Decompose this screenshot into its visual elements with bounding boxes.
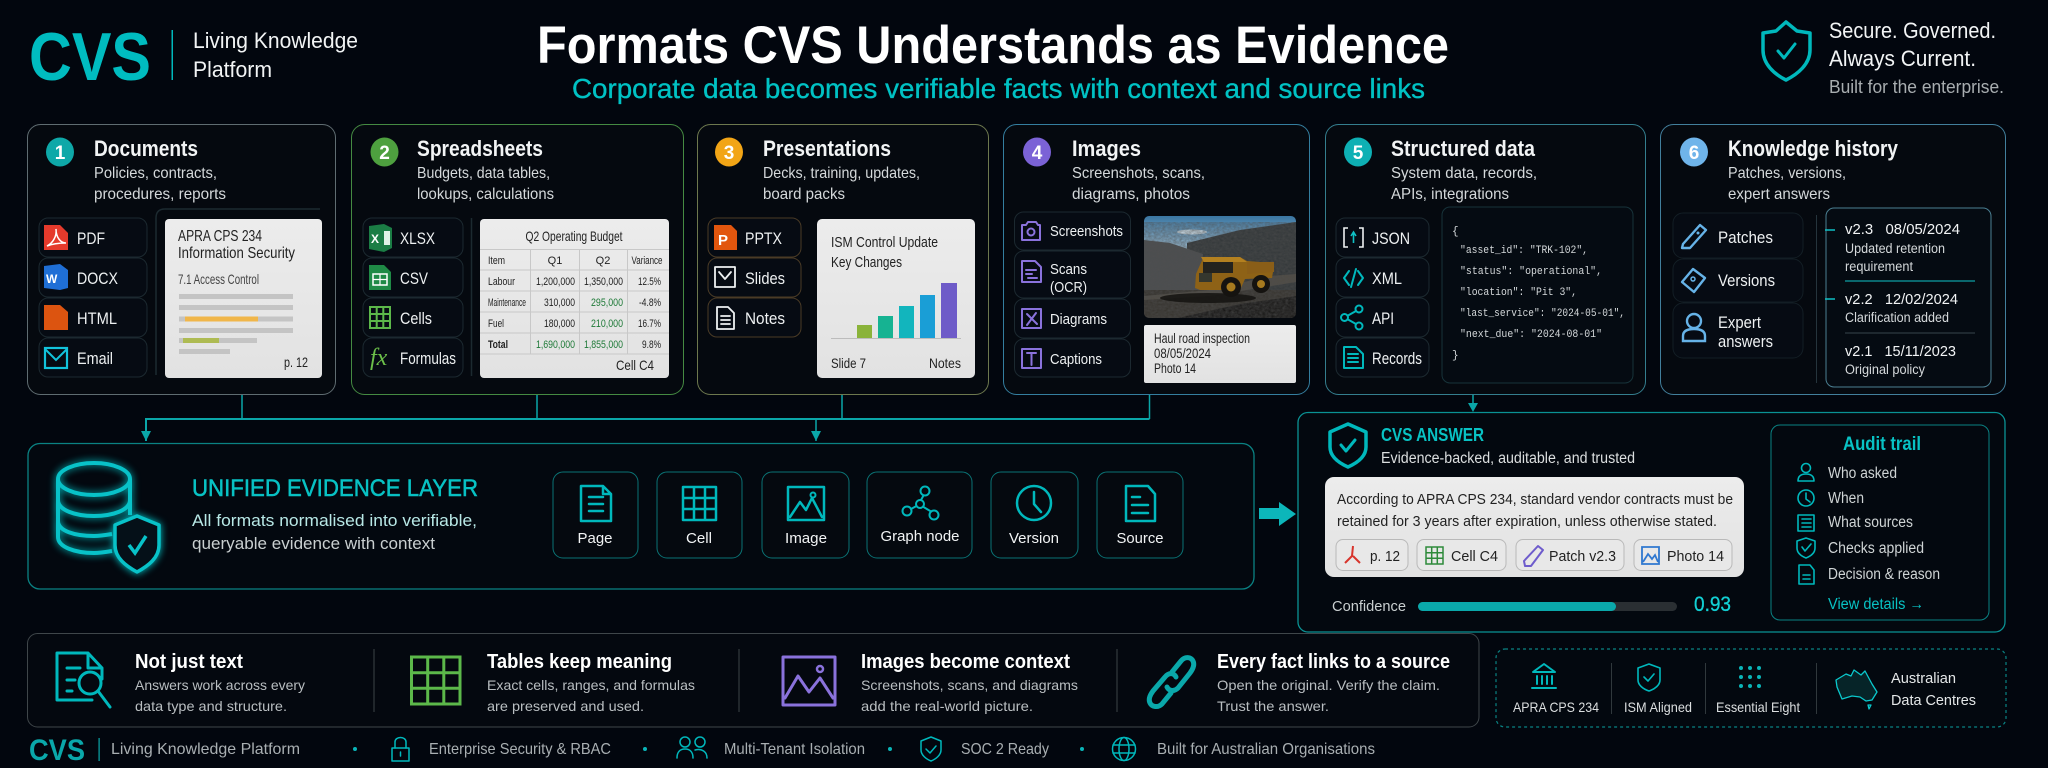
tile: cell: Cell bbox=[686, 530, 712, 547]
benefit: every fact links to a source: Open the original. Verify the claim. bbox=[1217, 677, 1440, 693]
audit icons bbox=[1797, 464, 1815, 584]
badge: APRA CPS 234 bbox=[1513, 664, 1599, 715]
document preview card: p. 12 bbox=[284, 354, 308, 370]
header logo: Living Knowledge bbox=[193, 28, 358, 53]
budget table card bbox=[480, 219, 669, 378]
chips bbox=[1673, 213, 1803, 358]
icon: database with shield bbox=[58, 463, 159, 572]
slide preview card bbox=[817, 219, 975, 378]
benefit: every fact links to a source bbox=[1149, 651, 1450, 714]
number badge 6: 6 bbox=[1689, 143, 1699, 164]
number badge 4 bbox=[1023, 138, 1051, 166]
description: diagrams, photos bbox=[1072, 186, 1190, 203]
format chips: PDF bbox=[77, 229, 105, 248]
description: Patches, versions, bbox=[1728, 165, 1846, 182]
format chips: (OCR) bbox=[1050, 279, 1087, 296]
chips: Patches bbox=[1718, 228, 1773, 247]
format chips: HTML bbox=[77, 309, 117, 328]
format chips: Screenshots bbox=[1050, 223, 1123, 240]
document preview card bbox=[165, 219, 322, 378]
footer bar: Living Knowledge Platform bbox=[111, 741, 300, 758]
header trust badge bbox=[1763, 18, 2004, 97]
badge: ISM aligned: ISM Aligned bbox=[1624, 699, 1692, 715]
citation chips bbox=[1336, 540, 1732, 570]
budget table card: Labour bbox=[488, 276, 515, 288]
benefit: images become context: Screenshots, scans, and diagrams bbox=[861, 677, 1078, 693]
benefit: tables keep meaning: Tables keep meaning bbox=[487, 651, 672, 673]
tile: page bbox=[553, 472, 638, 558]
photo caption card: Photo 14 bbox=[1154, 361, 1196, 376]
citation chips: Cell C4 bbox=[1451, 548, 1498, 565]
format chips: Email bbox=[77, 349, 113, 368]
chips: answers bbox=[1718, 332, 1773, 351]
version timeline card: Clarification added bbox=[1845, 310, 1949, 325]
panel: audit trail: When bbox=[1828, 490, 1864, 507]
heading: Spreadsheets bbox=[417, 136, 543, 161]
format chips: API bbox=[1372, 309, 1394, 328]
footer bar: CVS bbox=[29, 734, 85, 767]
benefit: every fact links to a source: Trust the answer. bbox=[1217, 698, 1329, 714]
chips: Expert bbox=[1718, 313, 1761, 332]
number badge 6 bbox=[1680, 138, 1708, 166]
version timeline card: requirement bbox=[1845, 259, 1913, 274]
panel: audit trail: Who asked bbox=[1828, 465, 1897, 482]
budget table card: Fuel bbox=[488, 318, 504, 330]
format chips: P bbox=[718, 232, 728, 249]
tile: cell bbox=[657, 472, 742, 558]
panel: knowledge history bbox=[1660, 124, 2006, 394]
format chips: Cells bbox=[400, 309, 432, 328]
photo caption card bbox=[1144, 325, 1296, 383]
format chips: Formulas bbox=[400, 349, 456, 368]
panel: audit trail: Checks applied bbox=[1828, 540, 1924, 557]
panel: audit trail: Decision & reason bbox=[1828, 566, 1940, 583]
description: System data, records, bbox=[1391, 165, 1537, 182]
panel: structured data bbox=[1326, 124, 1646, 394]
description bbox=[192, 511, 477, 553]
tile: graph node bbox=[867, 472, 972, 558]
footer bar: SOC 2 Ready bbox=[961, 741, 1049, 758]
tile: version: Version bbox=[1009, 530, 1059, 547]
format chips: Notes bbox=[745, 309, 785, 328]
budget table card: Maintenance bbox=[488, 297, 526, 309]
format chips: Slides bbox=[745, 269, 785, 288]
tile: version bbox=[991, 472, 1078, 558]
description: procedures, reports bbox=[94, 186, 226, 203]
header trust badge: Secure. Governed. bbox=[1829, 18, 1996, 43]
JSON code box: } bbox=[1452, 350, 1459, 362]
format chips: CSV bbox=[400, 269, 429, 288]
footer bar bbox=[29, 734, 1375, 767]
budget table card: Item bbox=[488, 255, 505, 267]
panel: compliance badges bbox=[1496, 649, 2006, 727]
header logo: CVS bbox=[29, 19, 151, 95]
JSON code box bbox=[1442, 207, 1633, 383]
footer bar: Built for Australian Organisations bbox=[1157, 741, 1375, 758]
badge: australian data centres: Data Centres bbox=[1891, 692, 1976, 709]
budget table card: 1,350,000 bbox=[584, 276, 623, 288]
description: Budgets, data tables, bbox=[417, 165, 550, 182]
format chips: PPTX bbox=[745, 229, 782, 248]
photo caption card: Haul road inspection bbox=[1154, 331, 1250, 346]
panel: CVS answer bbox=[1298, 412, 2005, 632]
photo: haul truck at mine site bbox=[1144, 216, 1296, 318]
description: lookups, calculations bbox=[417, 186, 554, 203]
badge: APRA CPS 234: APRA CPS 234 bbox=[1513, 699, 1599, 715]
answer card bbox=[1325, 477, 1744, 577]
format chips bbox=[708, 218, 801, 337]
title: Formats CVS Understands as Evidence bbox=[537, 16, 1449, 75]
format chips: DOCX bbox=[77, 269, 118, 288]
tile: image bbox=[762, 472, 849, 558]
format chips: Scans bbox=[1050, 261, 1087, 278]
budget table card: 1,200,000 bbox=[536, 276, 575, 288]
description: Screenshots, scans, bbox=[1072, 165, 1205, 182]
format chips: Captions bbox=[1050, 351, 1102, 368]
slide preview card: Notes bbox=[929, 355, 961, 371]
format chips: JSON bbox=[1372, 229, 1410, 248]
benefit: images become context: Images become context bbox=[861, 651, 1070, 673]
budget table card: Total bbox=[488, 339, 508, 351]
budget table card: 295,000 bbox=[591, 297, 623, 309]
document preview card: APRA CPS 234 bbox=[178, 228, 262, 245]
number badge 5: 5 bbox=[1353, 143, 1364, 164]
JSON code box: "next_due": "2024-08-01" bbox=[1460, 329, 1602, 341]
benefit: images become context: add the real-world picture. bbox=[861, 698, 1033, 714]
document preview card: Information Security bbox=[178, 245, 295, 262]
budget table card: 1,855,000 bbox=[584, 339, 623, 351]
icon: lock bbox=[392, 738, 409, 761]
panel: audit trail: View details → bbox=[1828, 596, 1924, 613]
heading: UNIFIED EVIDENCE LAYER bbox=[192, 475, 478, 502]
budget table card: 1,690,000 bbox=[536, 339, 575, 351]
number badge 3 bbox=[715, 138, 743, 166]
tile: source bbox=[1097, 472, 1183, 558]
icon: shield bbox=[921, 737, 941, 761]
answer card: retained for 3 years after expiration, unless otherwise stated. bbox=[1337, 513, 1717, 530]
format chips: X bbox=[371, 232, 379, 246]
description bbox=[1391, 165, 1537, 203]
description: Decks, training, updates, bbox=[763, 165, 920, 182]
JSON code box: "asset_id": "TRK-102", bbox=[1460, 245, 1588, 257]
confidence meter: Confidence bbox=[1332, 598, 1406, 615]
format chips bbox=[363, 218, 463, 377]
description: All formats normalised into verifiable, bbox=[192, 511, 477, 530]
benefit: not just text bbox=[57, 651, 305, 714]
benefit: tables keep meaning: Exact cells, ranges, and formulas bbox=[487, 677, 695, 693]
number badge 1 bbox=[46, 138, 74, 166]
benefit: every fact links to a source: Every fact links to a source bbox=[1217, 651, 1450, 673]
budget table card: 12.5% bbox=[638, 276, 661, 288]
heading: Knowledge history bbox=[1728, 136, 1899, 161]
heading: Presentations bbox=[763, 136, 891, 161]
budget table card: -4.8% bbox=[639, 297, 661, 309]
budget table card: Q2 Operating Budget bbox=[526, 228, 623, 244]
confidence meter: 0.93 bbox=[1694, 593, 1731, 616]
version timeline card: v2.2 12/02/2024 bbox=[1845, 292, 1958, 308]
number badge 5 bbox=[1344, 138, 1372, 166]
format chips bbox=[1336, 218, 1429, 377]
format chips: Records bbox=[1372, 349, 1422, 368]
photo caption card: 08/05/2024 bbox=[1154, 346, 1211, 361]
tile: source: Source bbox=[1116, 530, 1164, 547]
footer bar: Multi-Tenant Isolation bbox=[724, 741, 865, 758]
budget table card: Cell C4 bbox=[616, 357, 654, 373]
panel: documents bbox=[28, 124, 336, 394]
footer bar: Enterprise Security & RBAC bbox=[429, 741, 611, 758]
description bbox=[1072, 165, 1205, 203]
budget table card: Q1 bbox=[548, 255, 562, 267]
badge: essential eight bbox=[1716, 666, 1800, 715]
badge: ISM aligned bbox=[1624, 664, 1692, 715]
format chips: XLSX bbox=[400, 229, 435, 248]
icon: people bbox=[677, 737, 707, 758]
JSON code box: { bbox=[1452, 226, 1459, 238]
description bbox=[1728, 165, 1846, 203]
JSON code box: "location": "Pit 3", bbox=[1460, 287, 1577, 299]
number badge 3: 3 bbox=[724, 143, 734, 164]
tile: page: Page bbox=[578, 530, 612, 547]
badge: australian data centres bbox=[1836, 670, 1976, 709]
budget table card: 16.7% bbox=[638, 318, 661, 330]
number badge 1: 1 bbox=[55, 143, 66, 164]
header trust badge: Built for the enterprise. bbox=[1829, 77, 2004, 97]
benefit: tables keep meaning: are preserved and used. bbox=[487, 698, 644, 714]
format chips: W bbox=[46, 272, 58, 286]
header logo bbox=[29, 19, 358, 95]
description: APIs, integrations bbox=[1391, 186, 1509, 203]
icon: answer shield bbox=[1330, 424, 1366, 467]
number badge 4: 4 bbox=[1032, 143, 1043, 164]
panel: benefits strip bbox=[28, 634, 1479, 727]
panel: unified evidence layer bbox=[28, 444, 1254, 589]
budget table card: 310,000 bbox=[544, 297, 575, 309]
citation chips: p. 12 bbox=[1370, 548, 1400, 565]
panel: images bbox=[1004, 124, 1310, 394]
description: Policies, contracts, bbox=[94, 165, 217, 182]
description bbox=[763, 165, 920, 203]
heading: CVS ANSWER bbox=[1381, 425, 1484, 445]
panel: audit trail: What sources bbox=[1828, 514, 1913, 531]
heading: Documents bbox=[94, 136, 198, 161]
description bbox=[94, 165, 226, 203]
budget table card: 9.8% bbox=[642, 339, 661, 351]
number badge 2 bbox=[370, 138, 398, 166]
heading: Images bbox=[1072, 136, 1141, 161]
JSON code box: "last_service": "2024-05-01", bbox=[1460, 308, 1625, 320]
benefit: images become context bbox=[783, 651, 1078, 714]
slide preview card: Slide 7 bbox=[831, 355, 866, 371]
panel: audit trail: Audit trail bbox=[1843, 434, 1921, 455]
header logo: Platform bbox=[193, 57, 272, 82]
budget table card: 210,000 bbox=[591, 318, 623, 330]
citation chips: Photo 14 bbox=[1667, 548, 1724, 565]
panel: presentations bbox=[698, 124, 988, 394]
budget table card: Variance bbox=[632, 255, 662, 267]
benefit: not just text: Answers work across every bbox=[135, 677, 305, 693]
slide preview card: ISM Control Update bbox=[831, 234, 938, 251]
tile: image: Image bbox=[785, 530, 827, 547]
version timeline card: v2.1 15/11/2023 bbox=[1845, 344, 1956, 360]
format chips: XML bbox=[1372, 269, 1402, 288]
format chips: fx bbox=[370, 345, 388, 371]
arrow: format panels into unified evidence layer bbox=[141, 395, 1150, 441]
version timeline card: Updated retention bbox=[1845, 241, 1945, 256]
badge: australian data centres: Australian bbox=[1891, 670, 1956, 687]
format chips: Diagrams bbox=[1050, 311, 1107, 328]
version timeline card: Original policy bbox=[1845, 362, 1925, 377]
icon: globe bbox=[1112, 738, 1136, 760]
benefit: tables keep meaning bbox=[412, 651, 695, 714]
tile: graph node: Graph node bbox=[880, 528, 960, 545]
number badge 2: 2 bbox=[379, 143, 390, 164]
panel: audit trail bbox=[1771, 425, 1989, 620]
budget table card: Q2 bbox=[596, 255, 610, 267]
bar chart bbox=[831, 283, 961, 338]
description bbox=[417, 165, 554, 203]
version timeline card: v2.3 08/05/2024 bbox=[1845, 222, 1960, 238]
panel: spreadsheets bbox=[352, 124, 684, 394]
chips: Versions bbox=[1718, 271, 1775, 290]
budget table card: 180,000 bbox=[544, 318, 575, 330]
document preview card: 7.1 Access Control bbox=[178, 271, 259, 287]
slide preview card: Key Changes bbox=[831, 254, 902, 271]
header trust badge: Always Current. bbox=[1829, 46, 1976, 71]
citation chips: Patch v2.3 bbox=[1549, 548, 1616, 565]
benefit: not just text: Not just text bbox=[135, 651, 243, 673]
benefit: not just text: data type and structure. bbox=[135, 698, 287, 714]
description: expert answers bbox=[1728, 186, 1830, 203]
format chips bbox=[39, 218, 147, 377]
confidence meter bbox=[1332, 593, 1731, 616]
format chips bbox=[1014, 212, 1130, 377]
subheading: Evidence-backed, auditable, and trusted bbox=[1381, 450, 1635, 467]
answer card: According to APRA CPS 234, standard vendor contracts must be bbox=[1337, 491, 1733, 508]
badge: essential eight: Essential Eight bbox=[1716, 699, 1800, 715]
description: queryable evidence with context bbox=[192, 534, 435, 553]
subtitle: Corporate data becomes verifiable facts with context and source links bbox=[572, 73, 1425, 104]
description: board packs bbox=[763, 186, 845, 203]
heading: Structured data bbox=[1391, 136, 1536, 161]
version timeline card bbox=[1825, 208, 1991, 387]
arrow: structured data into CVS answer bbox=[1468, 395, 1478, 412]
arrow: unified layer to CVS answer bbox=[1259, 502, 1296, 526]
JSON code box: "status": "operational", bbox=[1460, 266, 1602, 278]
